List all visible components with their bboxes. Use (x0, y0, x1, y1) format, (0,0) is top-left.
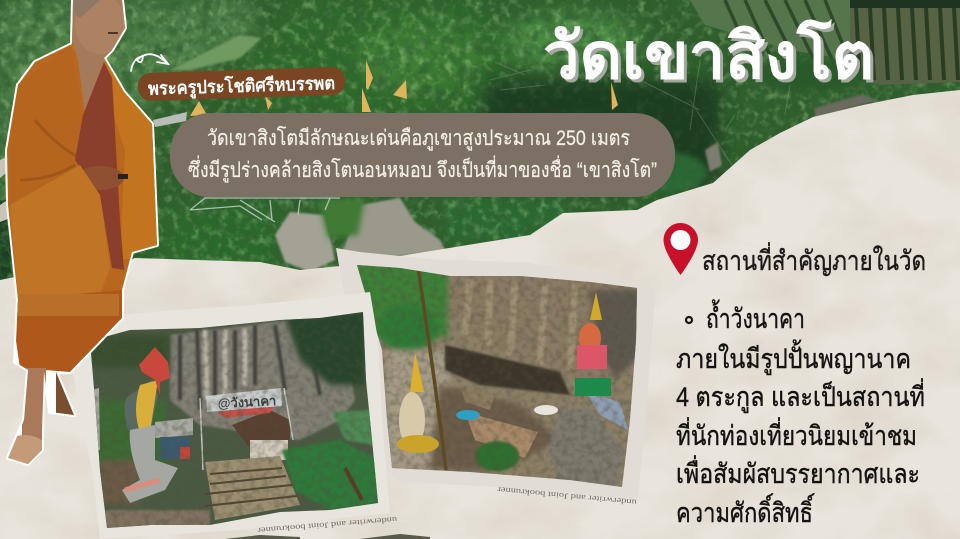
photo frame 2: torn paper (336, 248, 655, 507)
description pill: วัดเขาสิงโตมีลักษณะเด่นคือภูเขาสูงประมาณ 250 เมตร (207, 126, 630, 151)
text block: Naga cave description: เพื่อสัมผัสบรรยากาศและ (676, 455, 920, 489)
vineyard rows (690, 0, 960, 91)
sign: @วังนาคา (217, 393, 277, 411)
photo 1: cave entrance with naga statue (85, 310, 385, 530)
text block: Naga cave description: ถ้ำวังนาคา (706, 299, 805, 334)
title: วัดเขาสิงโต (543, 18, 874, 92)
description pill: ซึ่งมีรูปร่างคล้ายสิงโตนอนหมอบ จึงเป็นที่มาของชื่อ “เขาสิงโต” (188, 155, 657, 183)
naga statue (122, 347, 178, 503)
statue: yellow naga figure (397, 352, 439, 453)
mirrored newsprint caption, frame 2: underwriter and Joint bookrunner (497, 485, 637, 507)
tree branches (490, 60, 790, 170)
name tag: monk name: พระครูประโชติศรีหบรรพต (148, 72, 335, 101)
mirrored newsprint caption, frame 1: underwriter and Joint bookrunner (257, 515, 398, 535)
sign (200, 388, 293, 470)
stone stairs (205, 456, 300, 520)
photo frame 1: torn paper (63, 292, 398, 539)
text block: Naga cave description: ความศักดิ์สิทธิ์ (676, 493, 815, 528)
ferns (282, 410, 378, 510)
monk figure cutout (0, 0, 170, 468)
river and buildings (153, 112, 187, 127)
text block: Naga cave description: ที่นักท่องเที่ยวนิยมเข้าชม (676, 417, 917, 451)
white scaffold (190, 198, 340, 222)
statue: red guardian figure (456, 292, 611, 420)
shaded forest interior (485, 80, 720, 185)
yellow flags (190, 60, 618, 116)
text block: Naga cave description (676, 299, 925, 528)
curved arrow pointing to name tag (131, 54, 168, 71)
title: วัดเขาสิงโต (546, 21, 877, 95)
photo 2: courtyard with statues (357, 265, 637, 487)
description pill (170, 113, 675, 197)
text block: Naga cave description: 4 ตระกูล และเป็นสถานที่ (676, 378, 925, 413)
icon: location pin (664, 223, 698, 275)
text block: Naga cave description: ภายในมีรูปปั้นพญานาค (676, 339, 911, 375)
limestone rocks (275, 95, 878, 272)
shelter and shrine (155, 405, 290, 460)
